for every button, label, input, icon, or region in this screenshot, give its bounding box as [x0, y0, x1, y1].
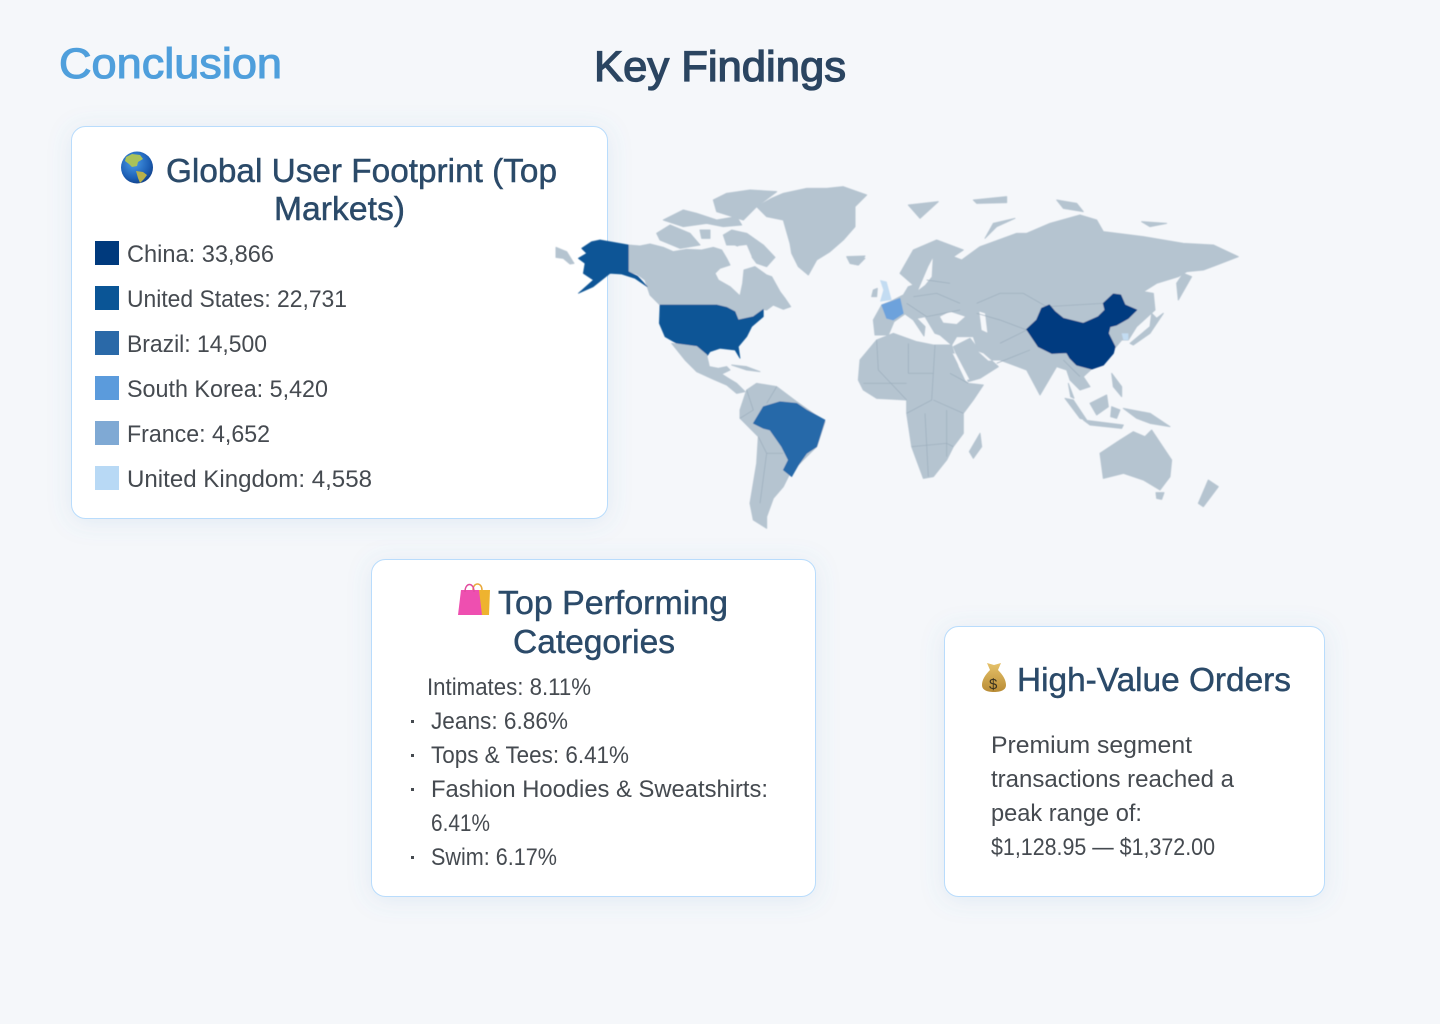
legend: United Kingdom: United Kingdom: 4,558	[127, 466, 372, 493]
icon: shopping bags	[458, 584, 490, 615]
heading: Key Findings: Key Findings	[594, 43, 846, 91]
panel: global user footprint	[72, 126, 608, 518]
map: Americas	[556, 187, 867, 528]
icon: globe	[121, 152, 153, 184]
title: Conclusion: Conclusion	[59, 40, 282, 88]
legend: South Korea: South Korea: 5,420	[127, 376, 328, 403]
map: Europe, Africa, Asia, Oceania	[850, 197, 1238, 507]
category list: Intimates: 8.11%	[427, 674, 591, 701]
panel heading: High-Value Orders	[1017, 661, 1291, 698]
category list: Fashion Hoodies & Sweatshirts:	[431, 776, 768, 803]
legend: Brazil: Brazil: 14,500	[127, 331, 267, 358]
legend: China: China: 33,866	[127, 241, 274, 268]
category list	[411, 674, 768, 871]
panel heading: Top Performing	[498, 584, 728, 621]
map: China	[1027, 294, 1137, 369]
panel: top performing categories	[372, 560, 816, 896]
category list: Swim: 6.17%	[431, 844, 557, 871]
category list: Jeans: 6.86%	[431, 708, 568, 735]
legend: United States: United States: 22,731	[127, 286, 347, 313]
panel: high-value orders	[944, 626, 1324, 896]
premium segment text: transactions reached a	[991, 766, 1235, 793]
world map	[556, 187, 1238, 528]
premium segment text: $1,128.95 — $1,372.00	[991, 834, 1215, 861]
map: France	[882, 298, 903, 320]
premium segment text: Premium segment	[991, 732, 1192, 759]
icon: money bag: $	[989, 676, 998, 693]
panel heading: Categories	[513, 623, 675, 660]
panel heading	[166, 152, 557, 227]
panel heading	[498, 584, 728, 660]
icon: money bag	[982, 663, 1006, 693]
map: United States	[578, 240, 763, 358]
panel heading: Global User Footprint (Top	[166, 152, 557, 189]
panel heading: Markets)	[274, 190, 405, 227]
premium segment text	[991, 732, 1235, 861]
legend: France: France: 4,652	[127, 421, 270, 448]
map: Brazil	[753, 402, 825, 477]
map: United Kingdom	[880, 280, 892, 302]
map: South Korea	[1122, 333, 1128, 340]
premium segment text: peak range of:	[991, 800, 1142, 827]
category list: 6.41%	[431, 810, 490, 837]
category list: Tops & Tees: 6.41%	[431, 742, 629, 769]
